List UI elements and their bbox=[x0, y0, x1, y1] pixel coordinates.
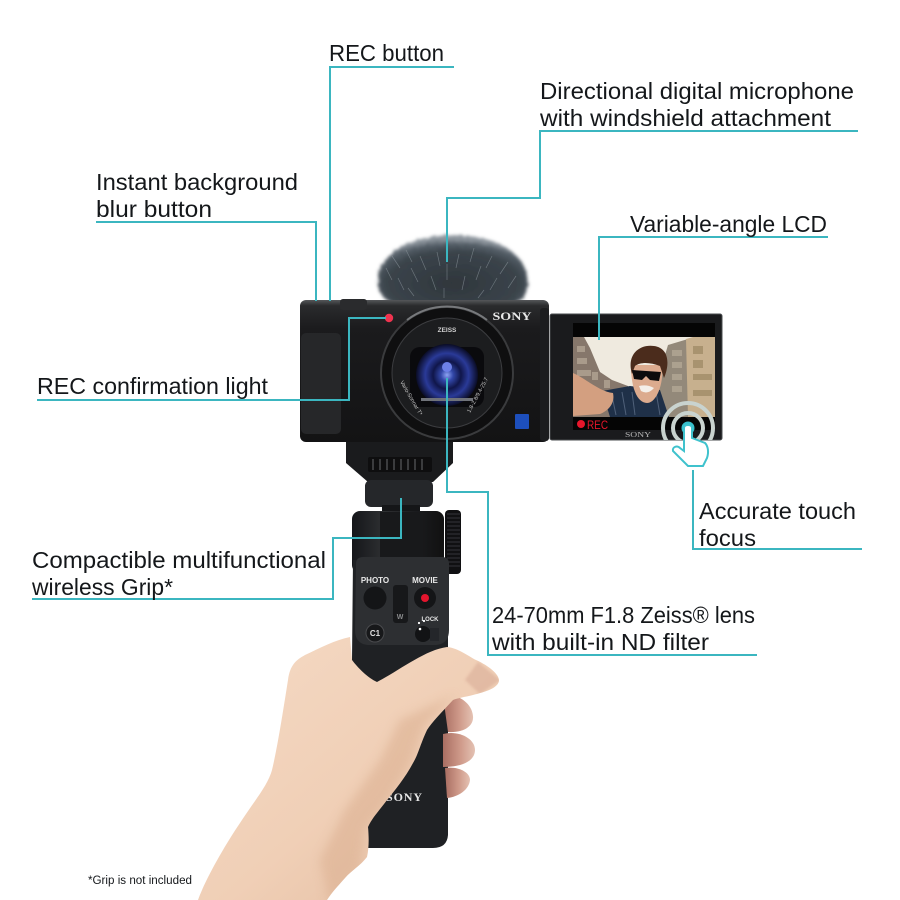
movie button bbox=[414, 587, 436, 609]
leader: REC light bbox=[37, 318, 386, 400]
grip head bbox=[352, 511, 444, 573]
label: microphone: Directional digital microphone bbox=[540, 78, 854, 104]
microphone windshield bbox=[378, 235, 528, 306]
tilt knob bbox=[445, 510, 461, 574]
label: lens bbox=[491, 602, 755, 655]
subject hair bbox=[631, 346, 667, 378]
leader: REC button bbox=[330, 67, 454, 301]
grip control labels: PHOTO bbox=[361, 576, 389, 585]
label: grip: wireless Grip* bbox=[31, 574, 173, 600]
leader: LCD bbox=[599, 237, 828, 340]
camera body bbox=[300, 299, 549, 442]
subject mouth bbox=[639, 385, 654, 392]
brand logo: SONY bbox=[492, 309, 532, 323]
subject face bbox=[631, 365, 662, 403]
label: lens: with built-in ND filter bbox=[491, 629, 709, 655]
grip mount bbox=[346, 441, 453, 517]
label: grip bbox=[31, 547, 326, 600]
lens: 1.8-2.8/9.4-25.7 bbox=[466, 377, 490, 414]
subject arm bbox=[573, 373, 613, 416]
control panel bbox=[355, 557, 449, 645]
label: microphone: with windshield attachment bbox=[539, 105, 832, 131]
touch icon hand bbox=[673, 425, 708, 466]
photo button bbox=[364, 586, 386, 610]
lens: Vario-Sonnar T* bbox=[398, 380, 423, 417]
right buildings bbox=[659, 340, 688, 417]
leader lines bbox=[32, 67, 862, 655]
leader: microphone bbox=[447, 131, 858, 262]
label: grip: Compactible multifunctional bbox=[32, 547, 326, 573]
REC indicator bbox=[577, 418, 608, 432]
fingers bbox=[443, 695, 475, 798]
hand bbox=[198, 637, 500, 900]
leader: touch focus bbox=[693, 470, 862, 549]
camera hand grip bbox=[301, 333, 341, 434]
thumb tip shading bbox=[465, 662, 500, 694]
touch icon rings bbox=[661, 401, 715, 440]
LCD logo: SONY bbox=[625, 431, 651, 439]
zoom lever bbox=[393, 585, 408, 623]
C1 button: C1 bbox=[370, 629, 381, 638]
label: REC light: REC confirmation light bbox=[37, 373, 269, 399]
top dial bbox=[340, 299, 367, 310]
grip control labels: MOVIE bbox=[412, 576, 439, 585]
label: touch focus: focus bbox=[699, 525, 756, 551]
label: touch focus bbox=[699, 498, 856, 551]
grip logo: SONY bbox=[386, 790, 422, 804]
label: blur button: blur button bbox=[96, 196, 212, 222]
label: REC button: REC button bbox=[329, 40, 444, 66]
variable-angle LCD bbox=[540, 308, 722, 466]
leader: blur button bbox=[96, 222, 316, 301]
lens bbox=[381, 306, 513, 439]
label: microphone bbox=[539, 78, 854, 131]
leader: lens bbox=[447, 378, 757, 655]
zeiss badge bbox=[515, 414, 529, 429]
LCD selfie photo bbox=[573, 335, 715, 417]
subject shirt bbox=[602, 386, 669, 417]
footnote: *Grip is not included bbox=[88, 875, 192, 887]
grip control labels: LOCK bbox=[422, 617, 439, 623]
label: blur button bbox=[96, 169, 298, 222]
zoom lever: W bbox=[397, 614, 404, 621]
shooting grip bbox=[346, 441, 461, 848]
grip control labels bbox=[361, 576, 439, 623]
left buildings bbox=[573, 337, 628, 417]
label: blur button: Instant background bbox=[96, 169, 298, 195]
grip handle bbox=[352, 560, 448, 848]
C1 button bbox=[366, 624, 384, 642]
REC indicator: REC bbox=[587, 418, 608, 432]
label: lens: 24-70mm F1.8 Zeiss® lens bbox=[492, 602, 755, 628]
label: LCD: Variable-angle LCD bbox=[630, 211, 827, 237]
label: touch focus: Accurate touch bbox=[699, 498, 856, 524]
leader: grip bbox=[32, 498, 401, 599]
lens: ZEISS bbox=[438, 327, 457, 334]
record light bbox=[385, 314, 393, 322]
subject sunglasses bbox=[632, 370, 661, 381]
lock switch bbox=[415, 620, 439, 642]
palm shadow bbox=[320, 701, 445, 898]
